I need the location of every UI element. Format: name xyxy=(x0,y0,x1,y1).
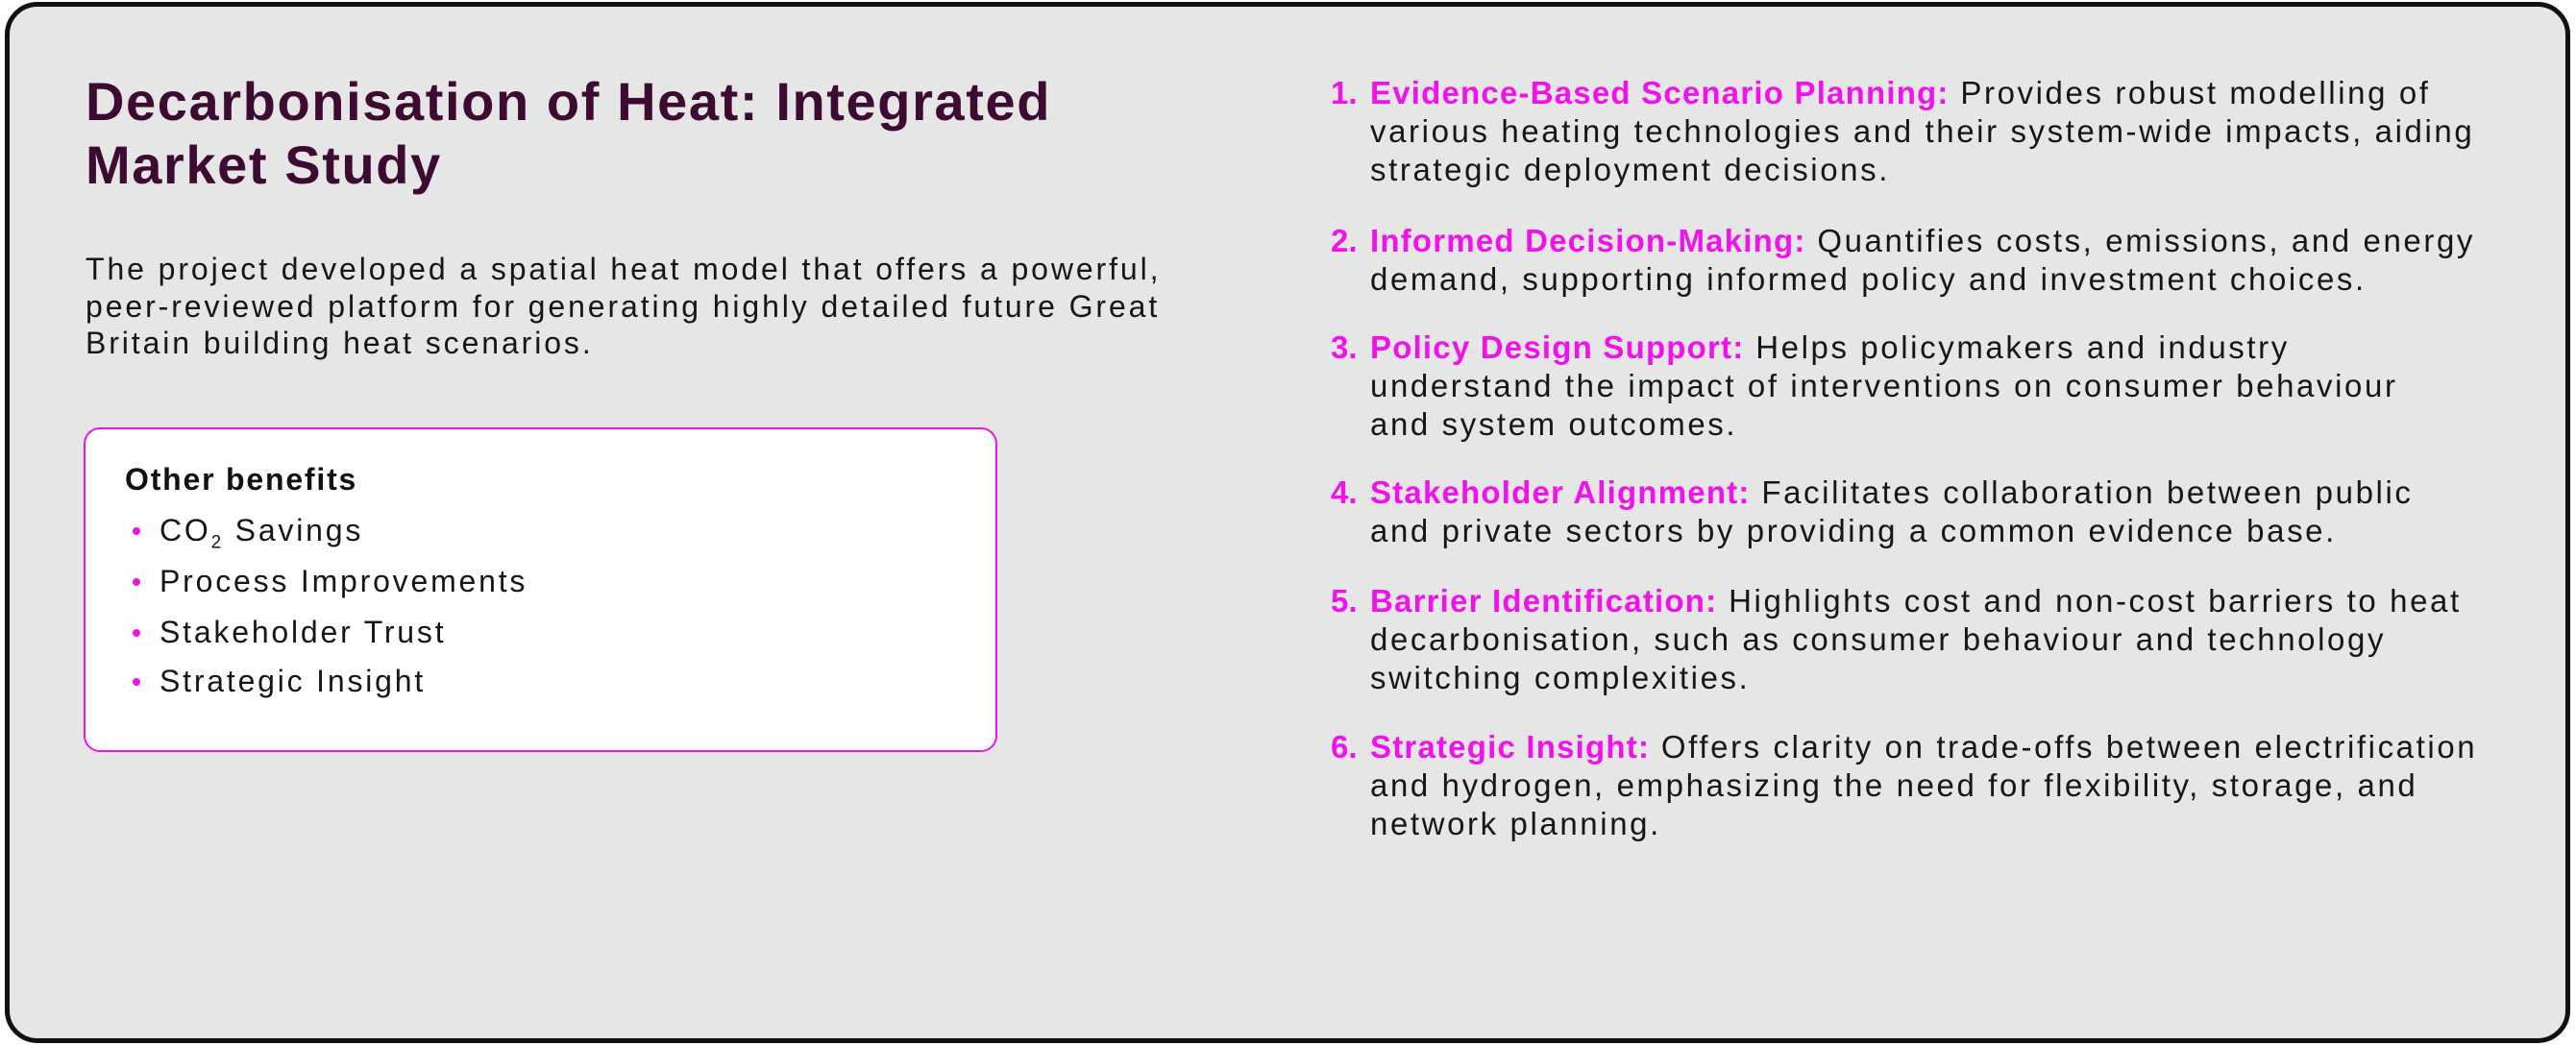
numbered item 4: Stakeholder Alignment: Facilitates collaboration between public xyxy=(1370,474,2414,510)
numbered item 2 xyxy=(1331,223,2475,297)
numbered item 2: demand, supporting informed policy and investment choices. xyxy=(1370,261,2367,297)
numbered item 5: 5. xyxy=(1331,583,1358,619)
numbered item 1: Evidence-Based Scenario Planning: Provides robust modelling of xyxy=(1370,75,2431,110)
list item: stakeholder trust: Stakeholder Trust xyxy=(159,615,446,649)
title: Market Study xyxy=(86,134,442,195)
list item: CO2 savings: CO2 Savings xyxy=(159,513,363,552)
numbered item 1: 1. xyxy=(1331,75,1358,110)
numbered item 2: 2. xyxy=(1331,223,1358,258)
numbered item 5: switching complexities. xyxy=(1370,660,1750,695)
list item: process improvements: Process Improvements xyxy=(159,564,527,598)
numbered item 3: 3. xyxy=(1331,329,1358,365)
numbered item 6: network planning. xyxy=(1370,806,1661,841)
numbered item 3: understand the impact of interventions on consumer behaviour xyxy=(1370,368,2398,403)
numbered item 5: Barrier Identification: Highlights cost and non-cost barriers to heat xyxy=(1370,583,2462,619)
numbered item 4 xyxy=(1331,474,2414,548)
list item: strategic insight: Strategic Insight xyxy=(159,664,426,698)
numbered item 4: and private sectors by providing a common evidence base. xyxy=(1370,513,2337,548)
panel: other benefits xyxy=(84,427,997,752)
numbered item 1: strategic deployment decisions. xyxy=(1370,152,1890,187)
numbered item 6: and hydrogen, emphasizing the need for flexibility, storage, and xyxy=(1370,767,2417,803)
numbered item 6: Strategic Insight: Offers clarity on trade-offs between electrification xyxy=(1370,729,2477,765)
numbered item 6 xyxy=(1331,729,2477,841)
numbered item 4: 4. xyxy=(1331,474,1358,510)
title xyxy=(86,71,1051,195)
numbered item 1 xyxy=(1331,75,2474,187)
text block: project description: Britain building heat scenarios. xyxy=(86,326,594,360)
numbered item 3: Policy Design Support: Helps policymakers and industry xyxy=(1370,329,2290,365)
title: Decarbonisation of Heat: Integrated xyxy=(86,71,1051,132)
numbered item 3 xyxy=(1331,329,2398,442)
numbered item 2: Informed Decision-Making: Quantifies costs, emissions, and energy xyxy=(1370,223,2475,258)
numbered item 1: various heating technologies and their system-wide impacts, aiding xyxy=(1370,113,2474,149)
text block: project description: The project developed a spatial heat model that offers a powerful, xyxy=(86,252,1161,286)
numbered item 5: decarbonisation, such as consumer behaviour and technology xyxy=(1370,621,2386,657)
numbered item 3: and system outcomes. xyxy=(1370,406,1737,442)
heading: other benefits: Other benefits xyxy=(125,462,357,497)
text block: project description xyxy=(86,252,1161,360)
numbered item 5 xyxy=(1331,583,2462,695)
numbered item 6: 6. xyxy=(1331,729,1358,765)
text block: project description: peer-reviewed platform for generating highly detailed future Great xyxy=(86,288,1160,323)
